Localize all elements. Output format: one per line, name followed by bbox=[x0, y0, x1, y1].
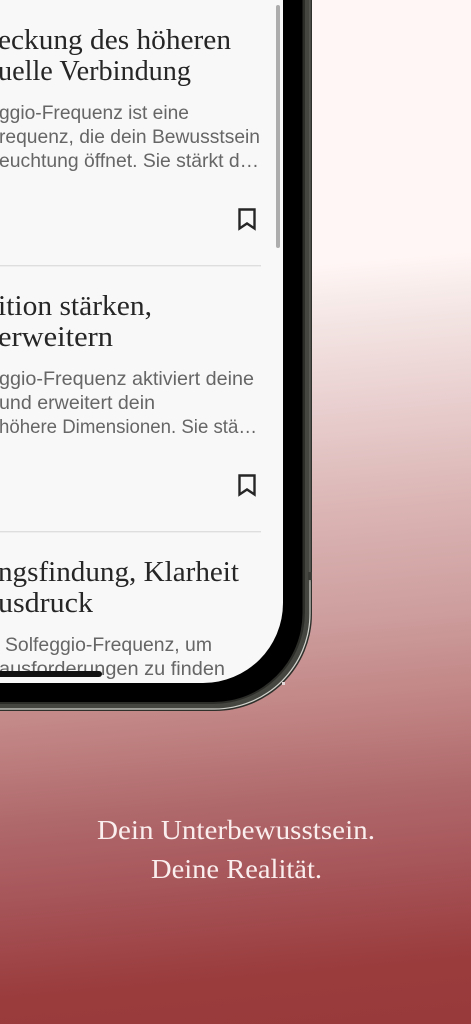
card 2 description: ggio-Frequenz aktiviert deine bbox=[0, 368, 254, 390]
card 3 bbox=[0, 557, 239, 680]
card 2 description: höhere Dimensionen. Sie stä… bbox=[0, 416, 257, 438]
card 1 description bbox=[0, 102, 260, 172]
card 3 heading: ngsfindung, Klarheit bbox=[0, 557, 239, 588]
card 3 description bbox=[0, 634, 225, 680]
card 3 heading bbox=[0, 560, 239, 612]
tagline bbox=[97, 815, 375, 884]
card 2 bbox=[0, 291, 257, 494]
tagline: Dein Unterbewusstsein. bbox=[97, 815, 375, 845]
icon: bookmark bbox=[240, 210, 254, 228]
card 2 heading bbox=[0, 295, 150, 346]
home indicator bbox=[0, 671, 102, 677]
card 2 heading: erweitern bbox=[0, 322, 113, 353]
phone screen bbox=[0, 0, 283, 683]
card 1 description: euchtung öffnet. Sie stärkt d… bbox=[0, 150, 259, 172]
card 2 description: und erweitert dein bbox=[0, 392, 155, 414]
card 1 heading: uelle Verbindung bbox=[0, 56, 191, 87]
card 2 description bbox=[0, 371, 254, 433]
tagline: Deine Realität. bbox=[151, 854, 322, 884]
card 1 description: ggio-Frequenz ist eine bbox=[0, 102, 189, 124]
card 2 heading: ition stärken, bbox=[0, 291, 152, 322]
card 1 description: requenz, die dein Bewusstsein bbox=[0, 126, 260, 148]
card 3 description: Solfeggio-Frequenz, um bbox=[5, 634, 212, 656]
card 3 description: ausforderungen zu finden bbox=[0, 658, 225, 680]
icon: bookmark bbox=[240, 476, 254, 494]
scrollbar bbox=[276, 5, 280, 248]
card 1 bbox=[0, 25, 260, 228]
card 1 heading bbox=[0, 25, 231, 87]
card 1 heading: eckung des höheren bbox=[0, 25, 231, 56]
phone frame bbox=[0, 0, 312, 711]
card 3 heading: usdruck bbox=[0, 588, 93, 619]
